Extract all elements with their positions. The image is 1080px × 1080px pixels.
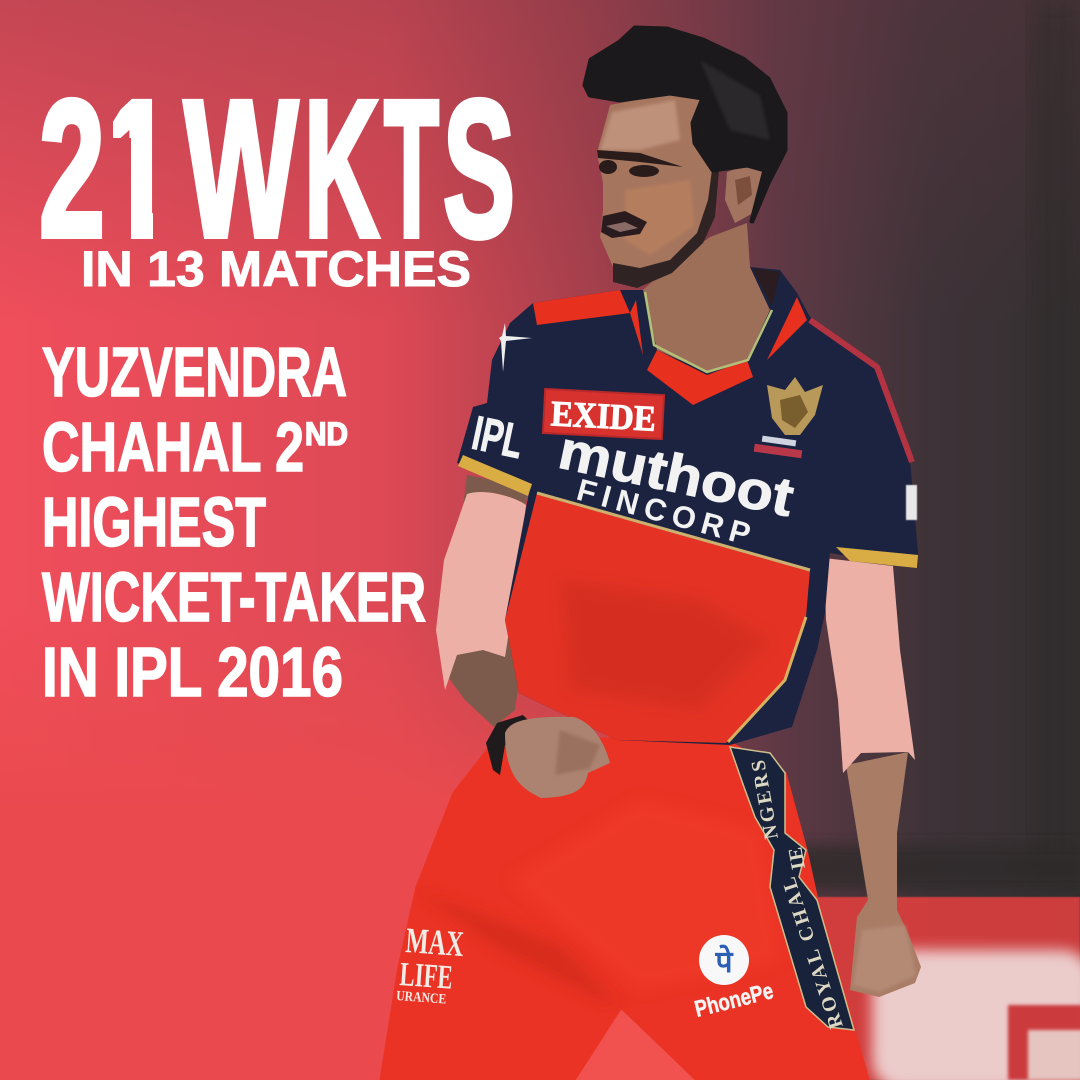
clenched fist [486, 715, 610, 798]
sponsor: PhonePe: PhonePe [692, 977, 776, 1022]
headline: 21 WKTS: T [384, 60, 439, 278]
sponsor: Muthoot Fincorp: muthoot [554, 420, 799, 528]
body text: Chahal description: CHAHAL 2 [42, 408, 304, 486]
jersey collar and shoulder panels [533, 290, 630, 325]
sponsor: Royal Challengers stripe text: NGERS [747, 758, 783, 841]
sponsor: Max Life: URANCE [396, 989, 447, 1007]
headline: 21 WKTS: 1 [100, 60, 175, 278]
shorts side stripe [730, 747, 854, 1030]
headline: 21 WKTS: K [304, 60, 379, 278]
sponsor: IPL: IPL [468, 407, 528, 469]
sleeve trim [458, 455, 532, 496]
neck [643, 223, 770, 372]
head [585, 28, 785, 288]
eyes and brows [597, 150, 683, 167]
body text: Chahal description: IN IPL 2016 [42, 633, 343, 711]
sponsor: Max Life: LIFE [398, 956, 454, 997]
player arm, viewer's right [824, 558, 921, 997]
body text: Chahal description: WICKET-TAKER [42, 558, 426, 636]
sponsor: Max Life: MAX [404, 920, 465, 964]
jersey navy [457, 267, 918, 745]
hair [585, 28, 785, 221]
player arm, viewer's left [436, 475, 530, 727]
subheading: in 13 matches: IN 13 MATCHES [81, 241, 471, 297]
body text: Chahal description: HIGHEST [42, 483, 266, 561]
jersey red lower panel [505, 493, 810, 743]
headline: 21 WKTS: 2 [39, 60, 105, 278]
team crest [754, 377, 823, 458]
mouth [601, 211, 647, 238]
shorts [381, 738, 868, 1080]
headline: 21 WKTS [41, 96, 512, 241]
headline: 21 WKTS: W [184, 60, 298, 278]
sponsor: Royal Challengers stripe text: LE [784, 845, 810, 871]
sponsor: PhonePe: पे [714, 944, 733, 979]
headline: 21 WKTS: S [443, 60, 515, 278]
sponsor: PhonePe [692, 935, 776, 1022]
sponsor: Royal Challengers stripe text [747, 758, 848, 1031]
body text: Chahal description: YUZVENDRA [42, 333, 347, 411]
body text: Chahal description [42, 333, 426, 711]
body text: Chahal description: ND [305, 416, 348, 452]
sleeve mark [906, 485, 917, 520]
beard [613, 170, 719, 288]
gap between the legs [570, 1005, 700, 1080]
player figure [381, 28, 921, 1080]
sponsor: Muthoot Fincorp: FINCORP [573, 472, 754, 552]
sponsor: Exide: EXIDE [550, 393, 657, 439]
blurred advertising board [560, 845, 1080, 1080]
jersey brand mark [499, 323, 532, 372]
sponsor: Max Life [396, 920, 465, 1007]
ear [725, 165, 767, 223]
sponsor: Royal Challengers stripe text: ROYAL CHAL [778, 874, 848, 1031]
